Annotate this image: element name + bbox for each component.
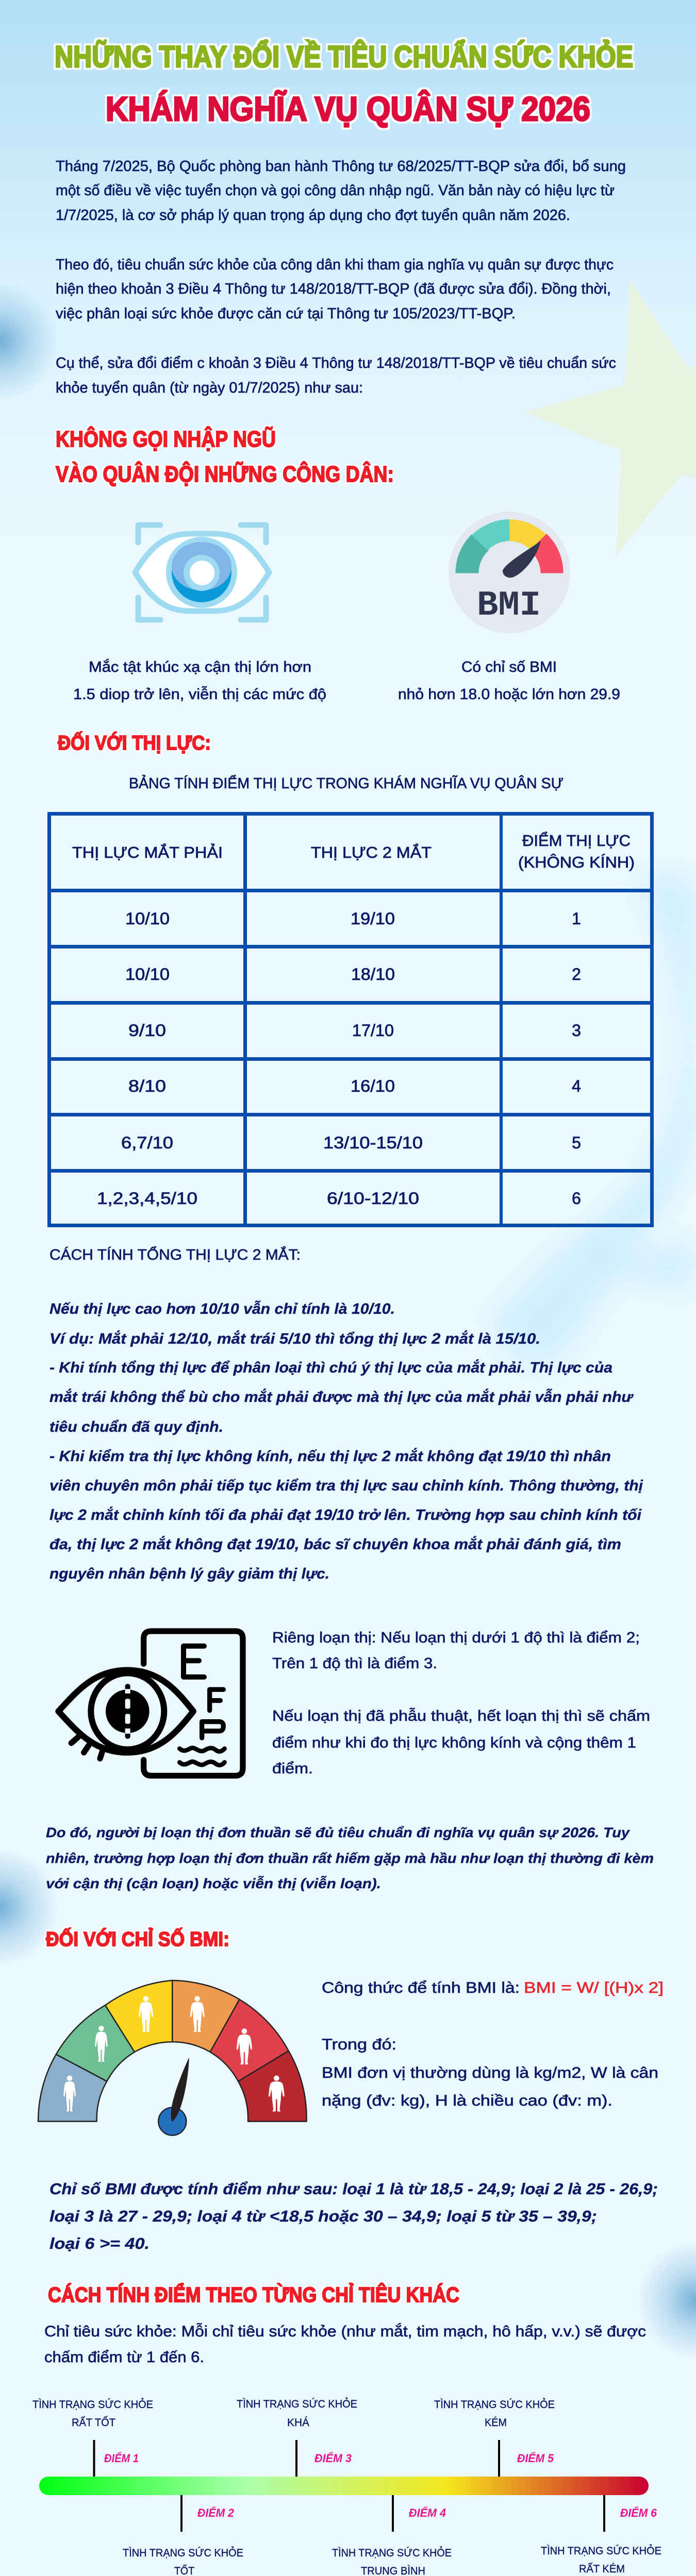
italic notes on vision: nguyên nhân bệnh lý gây giảm thị lực. [49, 1566, 329, 1582]
caption: eye: Mắc tật khúc xạ cận thị lớn hơn [89, 658, 311, 675]
vision score table: THỊ LỰC 2 MẮT [311, 843, 432, 861]
vision score table: 16/10 [351, 1077, 395, 1095]
intro paragraph 2 [56, 257, 614, 322]
caption: eye: 1.5 diop trở lên, viễn thị các mức độ [73, 686, 326, 703]
italic notes on vision [49, 1300, 643, 1582]
intro paragraph 3 [56, 355, 616, 396]
table title: BẢNG TÍNH ĐIỂM THỊ LỰC TRONG KHÁM NGHĨA VỤ QUÂN SỰ [129, 774, 564, 792]
astigmatism note: Trên 1 độ thì là điểm 3. [272, 1655, 437, 1672]
italic notes on vision: mắt trái không thể bù cho mắt phải được mà thị lực của mắt phải vẫn phải như [49, 1388, 634, 1405]
scale chart: health score bar [32, 2398, 661, 2576]
caption: BMI: nhỏ hơn 18.0 hoặc lớn hơn 29.9 [398, 686, 620, 703]
chart: BMI semicircle gauge [38, 1980, 307, 2136]
intro paragraph 1: 1/7/2025, là cơ sở pháp lý quan trọng áp dụng cho đợt tuyển quân năm 2026. [56, 207, 570, 224]
BMI formula text: BMI = W/ [(H)x 2] [524, 1979, 664, 1996]
icon: BMI gauge: BMI [477, 586, 541, 625]
scale chart: health score bar: TÌNH TRẠNG SỨC KHỎE [541, 2545, 661, 2557]
italic notes on vision: tiêu chuẩn đã quy định. [49, 1419, 223, 1435]
vision score table: 6/10-12/10 [327, 1189, 419, 1208]
heading: không gọi nhập ngũ: KHÔNG GỌI NHẬP NGŨ [56, 426, 276, 452]
italic conclusion on astigmatism [46, 1825, 654, 1891]
vision score table: 5 [572, 1133, 581, 1152]
heading: không gọi nhập ngũ: VÀO QUÂN ĐỘI NHỮNG CÔNG DÂN: [56, 461, 394, 487]
vision score table: 3 [572, 1021, 581, 1040]
italic notes on vision: viên chuyên môn phải tiếp tục kiểm tra thị lực sau chỉnh kính. Thông thường, thị [49, 1478, 643, 1494]
italic conclusion on astigmatism: với cận thị (cận loạn) hoặc viễn thị (viễn loạn). [46, 1875, 381, 1891]
scale chart: health score bar: ĐIỂM 6 [620, 2506, 657, 2519]
BMI score italic text: Chỉ số BMI được tính điểm như sau: loại 1 là từ 18,5 - 24,9; loại 2 là 25 - 26,9; [49, 2180, 658, 2198]
scoring intro [44, 2323, 646, 2366]
astigmatism note: Nếu loạn thị đã phẫu thuật, hết loạn thị thì sẽ chấm [272, 1707, 650, 1724]
scale chart: health score bar: ĐIỂM 2 [197, 2506, 235, 2519]
scale chart: health score bar: TÌNH TRẠNG SỨC KHỎE [123, 2547, 243, 2559]
vision score table [47, 812, 654, 1227]
italic notes on vision: đa, thị lực 2 mắt không đạt 19/10, bác sĩ chuyên khoa mắt phải đánh giá, tìm [49, 1535, 621, 1553]
scoring intro: chấm điểm từ 1 đến 6. [44, 2349, 204, 2366]
intro paragraph 2: Theo đó, tiêu chuẩn sức khỏe của công dân khi tham gia nghĩa vụ quân sự được thực [56, 257, 614, 273]
caption: eye [73, 658, 326, 703]
intro paragraph 2: hiện theo khoản 3 Điều 4 Thông tư 148/2018/TT-BQP (đã được sửa đổi). Đồng thời, [56, 281, 611, 297]
scale chart: health score bar: TÌNH TRẠNG SỨC KHỎE [332, 2547, 452, 2559]
scale chart: health score bar: KHÁ [287, 2417, 309, 2429]
astigmatism note [272, 1630, 650, 1777]
vision score table: THỊ LỰC MẮT PHẢI [72, 843, 223, 861]
vision score table: 10/10 [125, 909, 170, 928]
BMI score italic text: loại 6 >= 40. [49, 2234, 150, 2252]
heading: đối với thị lực: ĐỐI VỚI THỊ LỰC: [58, 731, 211, 754]
italic conclusion on astigmatism: nhiên, trường hợp loạn thị đơn thuần rất hiếm gặp mà hầu như loạn thị thường đi kèm [46, 1851, 654, 1866]
scale chart: health score bar: TÌNH TRẠNG SỨC KHỎE [237, 2398, 357, 2410]
astigmatism note: điểm như khi đo thị lực không kính và cộng thêm 1 [272, 1735, 636, 1751]
intro paragraph 1: Tháng 7/2025, Bộ Quốc phòng ban hành Thông tư 68/2025/TT-BQP sửa đổi, bổ sung [56, 158, 626, 175]
intro paragraph 1: một số điều về việc tuyển chọn và gọi công dân nhập ngũ. Văn bản này có hiệu lực từ [56, 182, 615, 199]
heading: đối với chỉ số BMI: ĐỐI VỚI CHỈ SỐ BMI: [46, 1927, 229, 1951]
BMI formula text: BMI đơn vị thường dùng là kg/m2, W là cân [322, 2064, 658, 2081]
BMI formula text [322, 1979, 664, 2109]
vision score table: 4 [572, 1077, 581, 1095]
scale chart: health score bar: ĐIỂM 4 [409, 2506, 446, 2519]
intro paragraph 2: việc phân loại sức khỏe được căn cứ tại Thông tư 105/2023/TT-BQP. [56, 306, 516, 322]
scale chart: health score bar: TÌNH TRẠNG SỨC KHỎE [434, 2398, 555, 2411]
scoring intro: Chỉ tiêu sức khỏe: Mỗi chỉ tiêu sức khỏe (như mắt, tim mạch, hô hấp, v.v.) sẽ được [44, 2323, 646, 2340]
scale chart: health score bar: RẤT TỐT [72, 2416, 115, 2429]
astigmatism note: Riêng loạn thị: Nếu loạn thị dưới 1 độ thì là điểm 2; [272, 1630, 640, 1646]
icon: BMI gauge [449, 512, 570, 633]
title [55, 40, 633, 128]
italic notes on vision: Ví dụ: Mắt phải 12/10, mắt trái 5/10 thì tổng thị lực 2 mắt là 15/10. [49, 1330, 540, 1347]
scale chart: health score bar: TÌNH TRẠNG SỨC KHỎE [32, 2398, 153, 2411]
BMI score italic text [49, 2180, 658, 2252]
intro paragraph 1 [56, 158, 626, 224]
scale chart: health score bar: ĐIỂM 5 [517, 2452, 554, 2465]
intro paragraph 3: khỏe tuyển quân (từ ngày 01/7/2025) như sau: [56, 380, 363, 396]
vision score table: 19/10 [351, 909, 395, 928]
vision score table: 10/10 [125, 965, 170, 984]
astigmatism note: điểm. [272, 1760, 313, 1777]
vision score table: 13/10-15/10 [323, 1133, 423, 1152]
vision score table: 9/10 [128, 1021, 166, 1040]
heading: cách tính tổng thị lực: CÁCH TÍNH TỔNG THỊ LỰC 2 MẮT: [49, 1246, 301, 1263]
caption: BMI: Có chỉ số BMI [461, 659, 557, 675]
vision score table: 8/10 [128, 1077, 166, 1095]
icon: eye scan [135, 525, 269, 620]
caption: BMI [398, 659, 620, 703]
vision score table: 1,2,3,4,5/10 [97, 1189, 197, 1208]
icon: eye with vision chart [58, 1631, 243, 1776]
vision score table: 6,7/10 [121, 1133, 173, 1152]
scale chart: health score bar: RẤT KÉM [579, 2563, 625, 2575]
scale chart: health score bar: ĐIỂM 1 [104, 2452, 139, 2465]
italic notes on vision: - Khi tính tổng thị lực để phân loại thì chú ý thị lực của mắt phải. Thị lực của [49, 1359, 612, 1376]
BMI formula text: Trong đó: [322, 2036, 396, 2053]
BMI formula text: Công thức để tính BMI là: [322, 1979, 520, 1996]
vision score table: 2 [572, 965, 581, 984]
italic notes on vision: - Khi kiểm tra thị lực không kính, nếu thị lực 2 mắt không đạt 19/10 thì nhân [49, 1447, 611, 1465]
intro paragraph 3: Cụ thể, sửa đổi điểm c khoản 3 Điều 4 Thông tư 148/2018/TT-BQP về tiêu chuẩn sức [56, 355, 616, 371]
vision score table: 18/10 [351, 965, 395, 984]
BMI score italic text: loại 3 là 27 - 29,9; loại 4 từ <18,5 hoặc 30 – 34,9; loại 5 từ 35 – 39,9; [49, 2207, 597, 2225]
scale chart: health score bar: ĐIỂM 3 [314, 2452, 352, 2465]
vision score table: ĐIỂM THỊ LỰC [522, 832, 631, 850]
heading: cách tính điểm: CÁCH TÍNH ĐIỂM THEO TỪNG CHỈ TIÊU KHÁC [48, 2282, 459, 2307]
italic notes on vision: Nếu thị lực cao hơn 10/10 vẫn chỉ tính là 10/10. [49, 1300, 395, 1317]
scale chart: health score bar: KÉM [485, 2417, 507, 2429]
vision score table: (KHÔNG KÍNH) [518, 853, 635, 871]
vision score table: 1 [572, 909, 581, 928]
vision score table: 17/10 [352, 1021, 394, 1040]
BMI formula text: nặng (đv: kg), H là chiều cao (đv: m). [322, 2092, 612, 2109]
vision score table: 6 [572, 1189, 581, 1208]
italic conclusion on astigmatism: Do đó, người bị loạn thị đơn thuần sẽ đủ tiêu chuẩn đi nghĩa vụ quân sự 2026. Tuy [46, 1825, 631, 1840]
italic notes on vision: lực 2 mắt chỉnh kính tối đa phải đạt 19/10 trở lên. Trường hợp sau chỉnh kính tối [49, 1506, 642, 1523]
title: KHÁM NGHĨA VỤ QUÂN SỰ 2026 [106, 90, 590, 128]
heading: không gọi nhập ngũ [56, 426, 394, 487]
